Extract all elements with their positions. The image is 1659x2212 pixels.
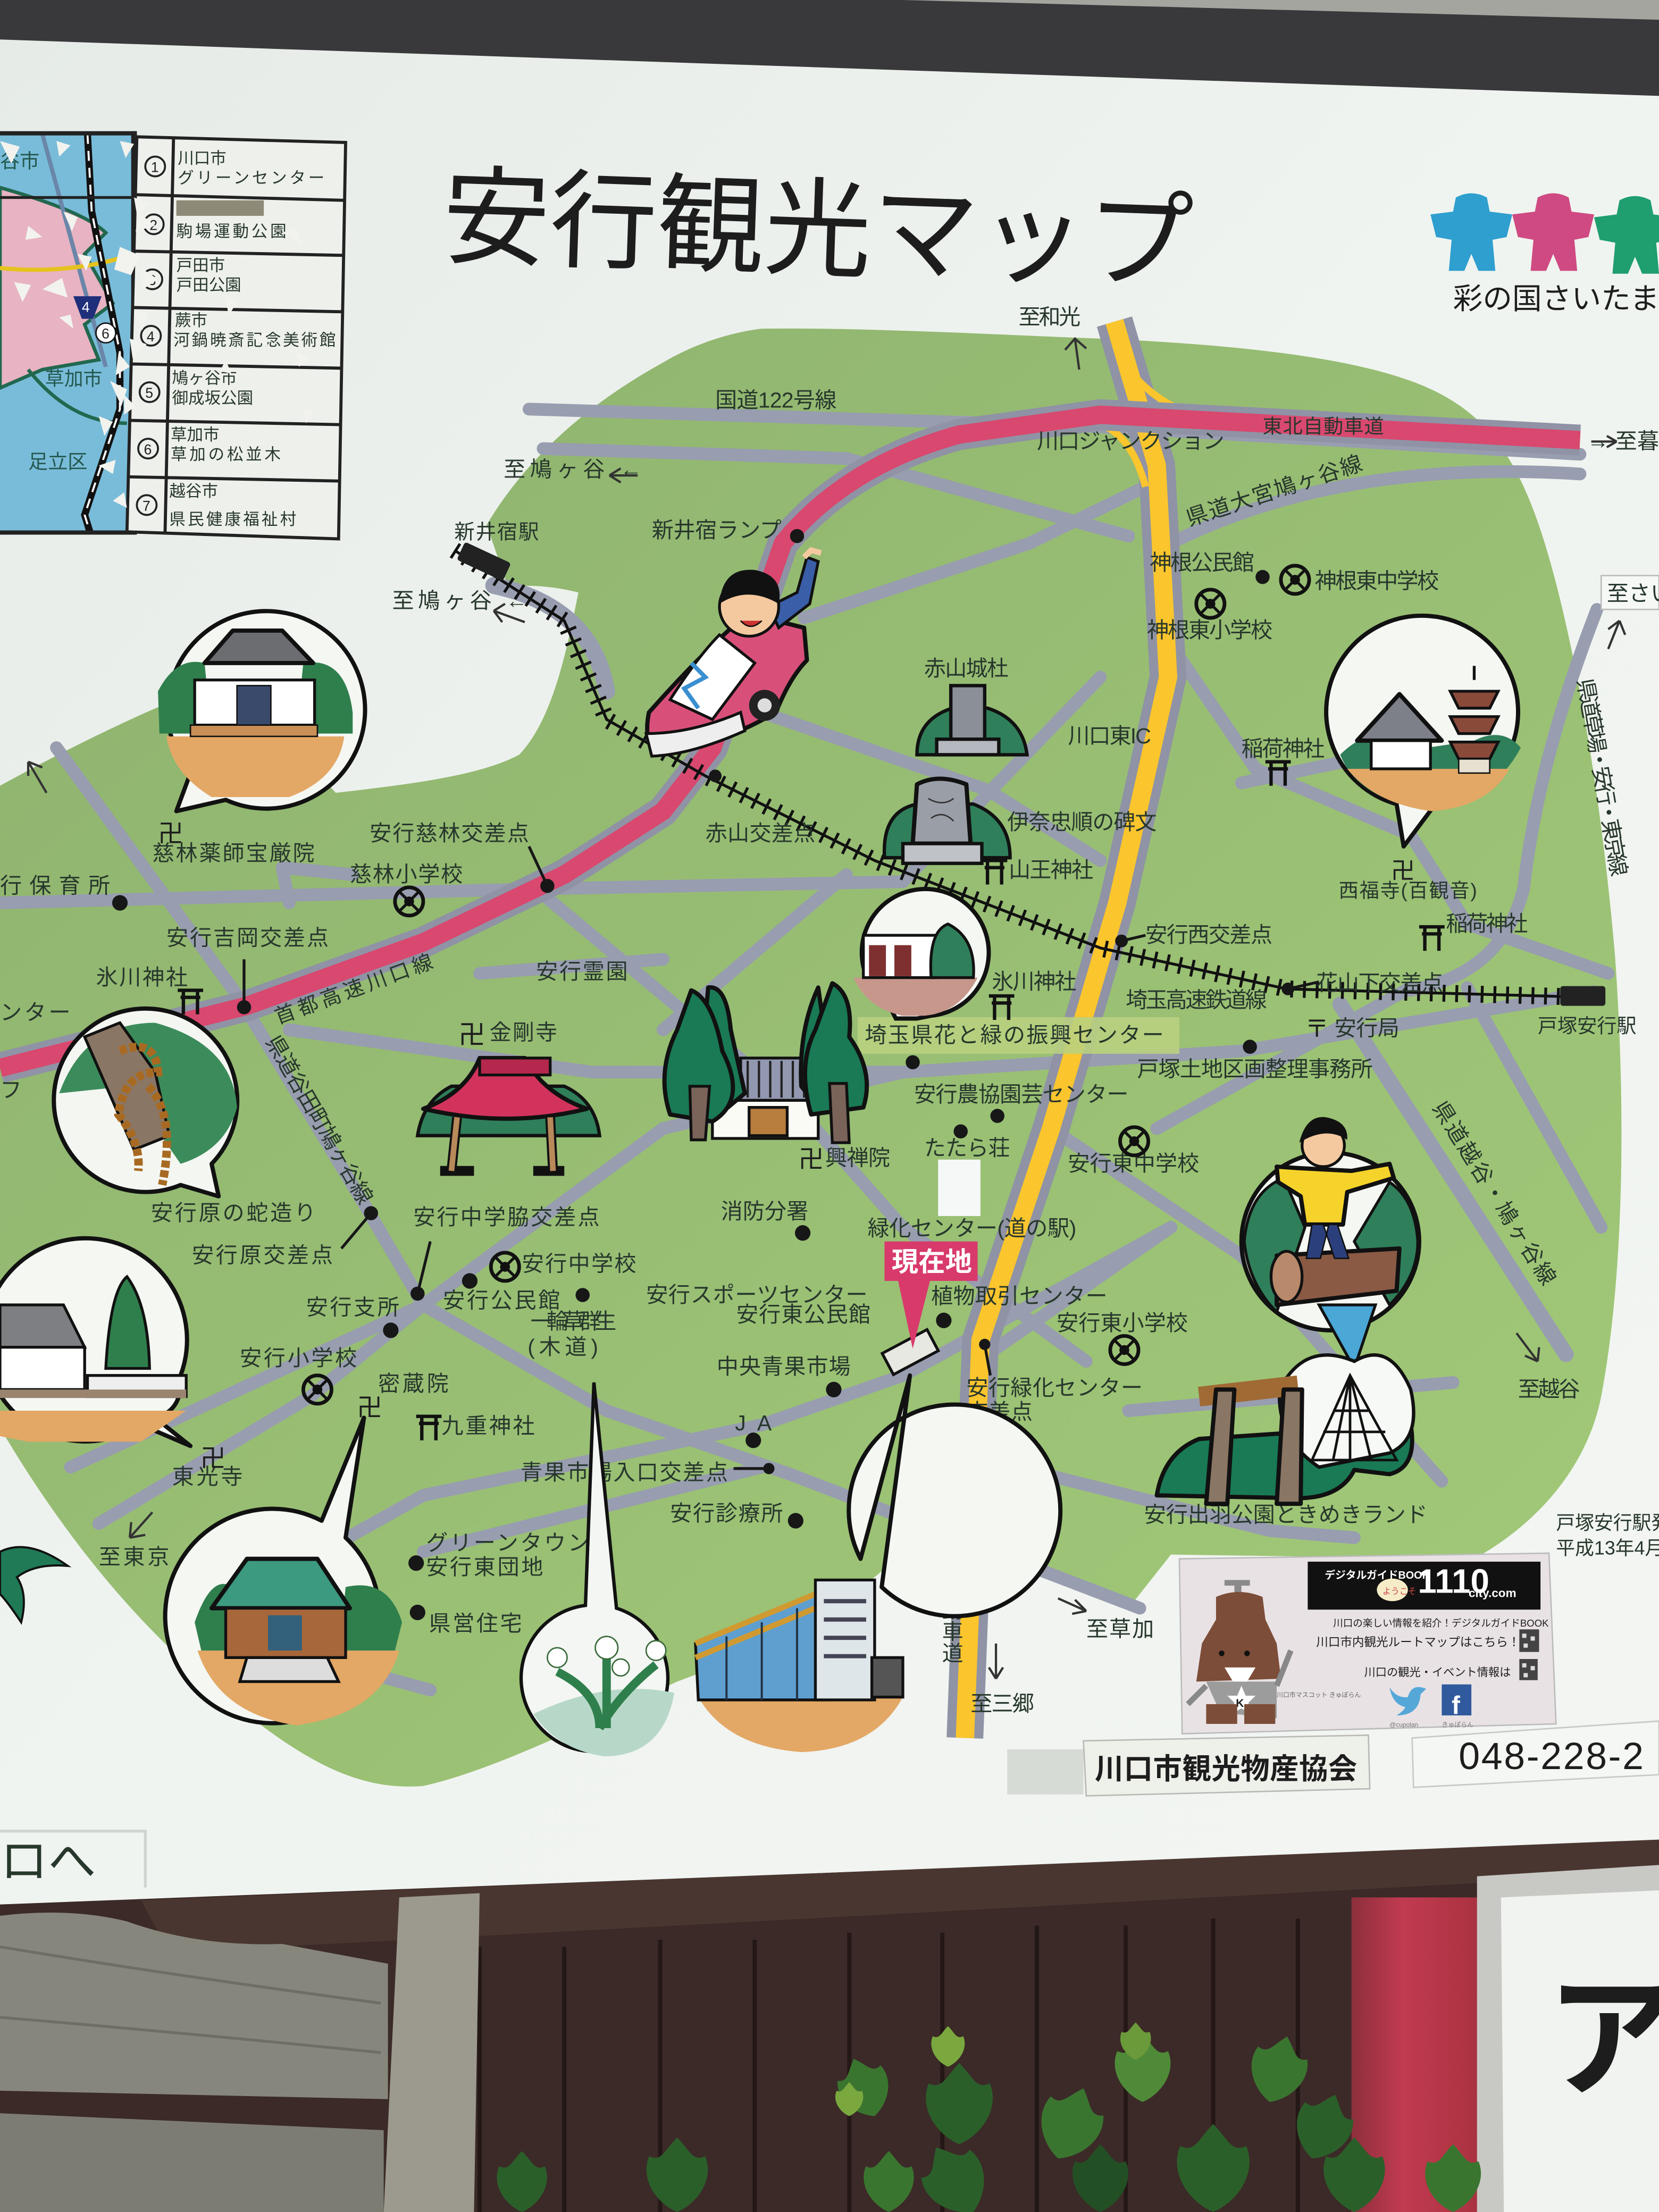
label 山王神社: 山王神社	[1009, 858, 1093, 882]
temple symbols: 卍	[799, 1146, 824, 1174]
label 氷川神社 centre: 氷川神社	[992, 969, 1076, 994]
sticker: tourism association name: 川口市観光物産協会	[1095, 1753, 1357, 1786]
sticker body text: 川口の観光・イベント情報は	[1364, 1666, 1511, 1679]
icon: Ichirinso flower bubble	[521, 1382, 674, 1756]
label 川口東IC: 川口東IC	[1068, 724, 1151, 748]
phone number panel	[1412, 1721, 1659, 1787]
legend row 4: 蕨市	[175, 312, 207, 330]
label 新井宿駅: 新井宿駅	[454, 521, 539, 543]
label 安行原の蛇造り: 安行原の蛇造り	[151, 1201, 316, 1225]
temple symbols: 卍	[200, 1445, 225, 1473]
legend row 4: 河鍋暁斎記念美術館	[173, 331, 336, 349]
current location sign board	[882, 1329, 939, 1375]
label 稲荷神社 east: 稲荷神社	[1446, 911, 1528, 936]
bottom-left arrow text: ロへ	[0, 1834, 96, 1888]
sticker body text: 川口市内観光ルートマップはこちら！	[1316, 1636, 1520, 1649]
label グリーンタウン安行東団地: 安行東団地	[426, 1555, 543, 1579]
label 国道122号線: 国道122号線	[715, 388, 836, 413]
label 安行東中学校: 安行東中学校	[1068, 1151, 1199, 1176]
label 安行小学校: 安行小学校	[240, 1346, 357, 1370]
label 安行西交差点: 安行西交差点	[1145, 923, 1272, 947]
direction arrows	[28, 339, 1625, 1679]
label 安行緑化センター交差点	[966, 1376, 1143, 1424]
label 安行慈林交差点: 安行慈林交差点	[370, 821, 529, 845]
road: Shuto expressway and Tohoku expressway, pink	[0, 415, 1580, 1068]
title: 安行観光マップ	[441, 157, 1195, 303]
post office symbol: 〒	[1305, 1015, 1329, 1042]
icon: snake rope tree bubble	[54, 1009, 237, 1196]
current location pointer: 現在地	[892, 1246, 972, 1277]
mascot Kyupolan: K	[1236, 1697, 1244, 1710]
label band 埼玉県花と緑の振興センター: 埼玉県花と緑の振興センター	[865, 1023, 1164, 1048]
sticker: Kawaguchi city digital guide	[1179, 1553, 1556, 1734]
label 安行中学脇交差点: 安行中学脇交差点	[413, 1205, 600, 1229]
label 安行公民館: 安行公民館	[443, 1288, 560, 1312]
label 至鳩ヶ谷 top: 至鳩ヶ谷 ←	[504, 457, 642, 482]
label Gaikan expressway vertical: 東京外環自動車道	[939, 1491, 962, 1663]
legend row 3: 戸田公園	[177, 276, 241, 295]
legend row 2: 2	[149, 217, 157, 233]
note 戸塚安行駅 date	[1556, 1512, 1659, 1559]
label JA: JA	[735, 1411, 772, 1435]
label 戸塚安行駅: 戸塚安行駅	[1538, 1015, 1637, 1037]
legend row 3	[143, 256, 241, 295]
legend row 3: 3	[148, 272, 156, 288]
tape patch	[1007, 1749, 1084, 1795]
label 安行緑化センター交差点: 交差点	[966, 1400, 1033, 1424]
label 安行東小学校: 安行東小学校	[1057, 1311, 1188, 1335]
legend row 1: 川口市	[178, 149, 227, 167]
current location pointer	[884, 1242, 978, 1348]
label フ: フ	[0, 1078, 22, 1102]
label 植物取引センター: 植物取引センター	[931, 1284, 1108, 1308]
mascot caption: 川口市マスコット きゅぽらん	[1277, 1691, 1361, 1699]
label 安行中学校: 安行中学校	[522, 1251, 636, 1276]
icon: car with waving boy	[646, 550, 821, 756]
label グリーンタウン安行東団地: グリーンタウン	[426, 1531, 590, 1555]
legend row 7: 県民健康福祉村	[169, 510, 296, 529]
label ンター: ンター	[0, 1000, 71, 1025]
route 4 shield: 4	[82, 299, 90, 315]
sticker body text	[1316, 1618, 1549, 1679]
twitter icon: @cupolan	[1389, 1721, 1418, 1728]
temple symbols: 卍	[357, 1394, 382, 1422]
label 花山下交差点: 花山下交差点	[1316, 970, 1443, 995]
white patch on map	[938, 1160, 981, 1216]
label prefectural road Kusaba: 県道草場・安行・東京線	[1572, 676, 1631, 878]
label prefectural road Koshigaya: 県道越谷・鳩ヶ谷線	[1428, 1097, 1561, 1289]
label 至越谷: 至越谷	[1518, 1377, 1580, 1402]
legend table	[127, 137, 346, 539]
legend row 6: 草加の松並木	[171, 446, 281, 464]
label 慈林小学校: 慈林小学校	[350, 862, 463, 886]
icon: Kongoji gate	[417, 1058, 600, 1171]
legend row 2	[144, 200, 287, 241]
palm leaf at left edge	[0, 1547, 68, 1622]
label 県営住宅: 県営住宅	[429, 1611, 522, 1636]
legend row 4: 4	[147, 329, 155, 345]
label 至草加: 至草加	[1086, 1617, 1154, 1641]
sticker black banner: 1110	[1418, 1562, 1489, 1600]
label 戸塚土地区画整理事務所: 戸塚土地区画整理事務所	[1137, 1057, 1372, 1081]
icon: boy on log bubble	[1242, 1117, 1419, 1368]
sticker: tourism association name	[1084, 1735, 1370, 1796]
legend row 5: 5	[145, 385, 153, 401]
road: Tokyo Gaikan expressway, yellow	[965, 322, 1210, 1738]
label 安行スポーツセンター: 安行スポーツセンター	[646, 1283, 868, 1307]
label 安行霊園: 安行霊園	[536, 959, 628, 984]
roads: local road network	[0, 409, 1608, 1690]
legend row 6: 草加市	[171, 426, 220, 444]
legend row 5	[140, 370, 253, 407]
label 興禅院: 興禅院	[825, 1145, 890, 1170]
white notice sign at right	[1477, 1865, 1659, 2212]
label 安行緑化センター交差点: 安行緑化センター	[966, 1376, 1143, 1400]
legend row 4	[141, 312, 336, 349]
red post	[1352, 1897, 1481, 2212]
logo caption: 彩の国さいたま	[1453, 282, 1659, 315]
label 慈林薬師宝厳院: 慈林薬師宝厳院	[153, 841, 315, 865]
label 神根東中学校: 神根東中学校	[1315, 568, 1439, 593]
label 安行支所: 安行支所	[306, 1295, 399, 1320]
label 至東京: 至東京	[99, 1545, 169, 1569]
label 至 east: → 至暮	[1587, 429, 1659, 454]
label 神根東小学校: 神根東小学校	[1147, 618, 1272, 642]
label prefectural road Omiya: 県道大宮鳩ヶ谷線	[1183, 451, 1365, 531]
facebook icon	[1442, 1685, 1473, 1728]
temple symbols: 卍	[1391, 857, 1415, 884]
label 新井宿ランプ: 新井宿ランプ	[652, 518, 782, 542]
phone number panel: 048-228-2	[1459, 1735, 1645, 1778]
label 埼玉高速鉄道線: 埼玉高速鉄道線	[1126, 987, 1267, 1012]
label たたら荘: たたら荘	[924, 1136, 1010, 1160]
legend row 2: 駒場運動公園	[177, 223, 287, 241]
inset marker 6: 6	[102, 326, 110, 342]
label 安行原交差点: 安行原交差点	[192, 1243, 333, 1267]
sign top frame	[0, 0, 1659, 99]
label Shuto expressway: 首都高速川口線	[272, 950, 436, 1029]
facebook icon: きゅぽらん	[1442, 1721, 1473, 1728]
label 至三郷: 至三郷	[970, 1691, 1034, 1716]
icon: Tokimeki Land playground	[1157, 1355, 1414, 1504]
legend row 1	[145, 149, 324, 187]
label 東光寺: 東光寺	[172, 1464, 242, 1489]
legend row 7	[137, 482, 296, 529]
label 一輪草群生: 一輪草群生	[531, 1309, 616, 1334]
icon: Saifukuji pagoda bubble	[1326, 616, 1521, 847]
label 赤山城杜: 赤山城杜	[924, 656, 1009, 681]
icon: Akayama castle monument	[917, 685, 1027, 755]
label 青果市場入口交差点: 青果市場入口交差点	[521, 1460, 728, 1485]
inset label Adachi: 足立区	[28, 450, 87, 473]
icon: Mitsuzoin temple bubble	[165, 1418, 402, 1725]
logo: Saitama three mascots	[1430, 193, 1659, 315]
shrine gate symbols	[178, 762, 1445, 1440]
peeling flakes on inset	[0, 141, 315, 508]
label 安行東公民館: 安行東公民館	[736, 1302, 870, 1327]
label 安行吉岡交差点: 安行吉岡交差点	[166, 926, 329, 950]
legend row 1: グリーンセンター	[178, 169, 324, 187]
inset place names: 谷市	[0, 150, 39, 172]
icon: Tokoji temple bubble	[0, 1238, 190, 1446]
sticker black banner	[1308, 1562, 1540, 1610]
legend row 6: 6	[144, 441, 152, 457]
label 至和光: 至和光	[1019, 305, 1080, 329]
label 西福寺: 西福寺(百観音)	[1339, 879, 1477, 901]
label 九重神社: 九重神社	[441, 1414, 535, 1438]
wooden bench	[0, 1893, 480, 2212]
legend row 3: 戸田市	[177, 256, 225, 274]
twitter icon	[1389, 1687, 1426, 1728]
bottom-left panel frame line	[0, 1831, 145, 1888]
label 至さい box	[1601, 575, 1659, 609]
route 4 shield	[73, 296, 102, 319]
temple symbols: 卍	[458, 1019, 485, 1050]
school symbols	[303, 566, 1309, 1404]
temple symbols: 卍	[158, 820, 183, 848]
sticker black banner: city.com	[1469, 1586, 1516, 1599]
legend row 5: 鳩ヶ谷市	[172, 370, 237, 388]
sticker QR codes	[1519, 1629, 1539, 1680]
facebook icon: f	[1452, 1691, 1460, 1720]
legend row 6	[138, 426, 281, 464]
inset marker 6	[96, 323, 116, 343]
railway: Saitama Rapid Railway	[454, 542, 1605, 1006]
label 安行出羽公園ときめきランド: 安行出羽公園ときめきランド	[1144, 1503, 1428, 1527]
label 至鳩ヶ谷 west: 至鳩ヶ谷 ←	[392, 588, 527, 613]
map: green area	[0, 329, 1621, 1787]
label 稲荷神社 north: 稲荷神社	[1242, 736, 1325, 761]
label 安行局: 安行局	[1335, 1016, 1400, 1040]
label 密蔵院: 密蔵院	[378, 1371, 449, 1396]
label 安行農協園芸センター: 安行農協園芸センター	[914, 1082, 1128, 1107]
label 緑化センター道の駅: 緑化センター(道の駅)	[868, 1216, 1076, 1241]
legend row 7: 越谷市	[169, 482, 218, 500]
icon: Ina Tadatsugu stone monument	[884, 778, 1010, 864]
label 安行診療所: 安行診療所	[670, 1501, 783, 1526]
sticker black banner: ようこそ	[1382, 1587, 1417, 1596]
label 安行保育所: 行保育所	[0, 873, 110, 898]
label 赤山交差点: 赤山交差点	[706, 821, 815, 845]
legend row 1: 1	[151, 160, 159, 175]
sticker body text: 川口の楽しい情報を紹介！デジタルガイドBOOK	[1333, 1618, 1549, 1629]
label prefectural road Yata: 県道谷田町鳩ヶ谷線	[261, 1031, 378, 1209]
ivy leaves	[497, 2022, 1481, 2212]
label band 埼玉県花と緑の振興センター	[858, 1017, 1179, 1054]
icon: Kozenin gate and cypress trees	[665, 983, 867, 1143]
label 川口ジャンクション: 川口ジャンクション	[1037, 429, 1225, 454]
sign bottom frame	[141, 1840, 1659, 1953]
sticker black banner: デジタルガイドBOOK	[1325, 1569, 1430, 1581]
label 消防分署: 消防分署	[721, 1199, 808, 1224]
icon: flower and greenery center bubble	[853, 889, 988, 1019]
inset area map	[0, 131, 137, 535]
mascot Kyupolan	[1188, 1580, 1291, 1724]
label 中央青果市場: 中央青果市場	[717, 1354, 851, 1379]
label 東北自動車道: 東北自動車道	[1262, 415, 1384, 437]
icon: temple bubble Jirin	[158, 611, 365, 811]
label 神根公民館: 神根公民館	[1150, 550, 1254, 575]
legend row 5: 御成坂公園	[172, 389, 253, 407]
icon: Kawaguchi green center station bubble	[696, 1376, 1060, 1752]
location dots	[112, 529, 1319, 1620]
label グリーンタウン安行東団地	[426, 1531, 590, 1579]
inset label Soka: 草加市	[45, 368, 102, 389]
legend row 7: 7	[143, 498, 150, 514]
label 氷川神社 west: 氷川神社	[96, 965, 188, 990]
label 金剛寺: 金剛寺	[490, 1020, 557, 1044]
temple symbols	[158, 820, 1415, 1473]
label 伊奈忠順の碑文: 伊奈忠順の碑文	[1007, 810, 1157, 834]
label 木道: (木道)	[527, 1335, 598, 1359]
